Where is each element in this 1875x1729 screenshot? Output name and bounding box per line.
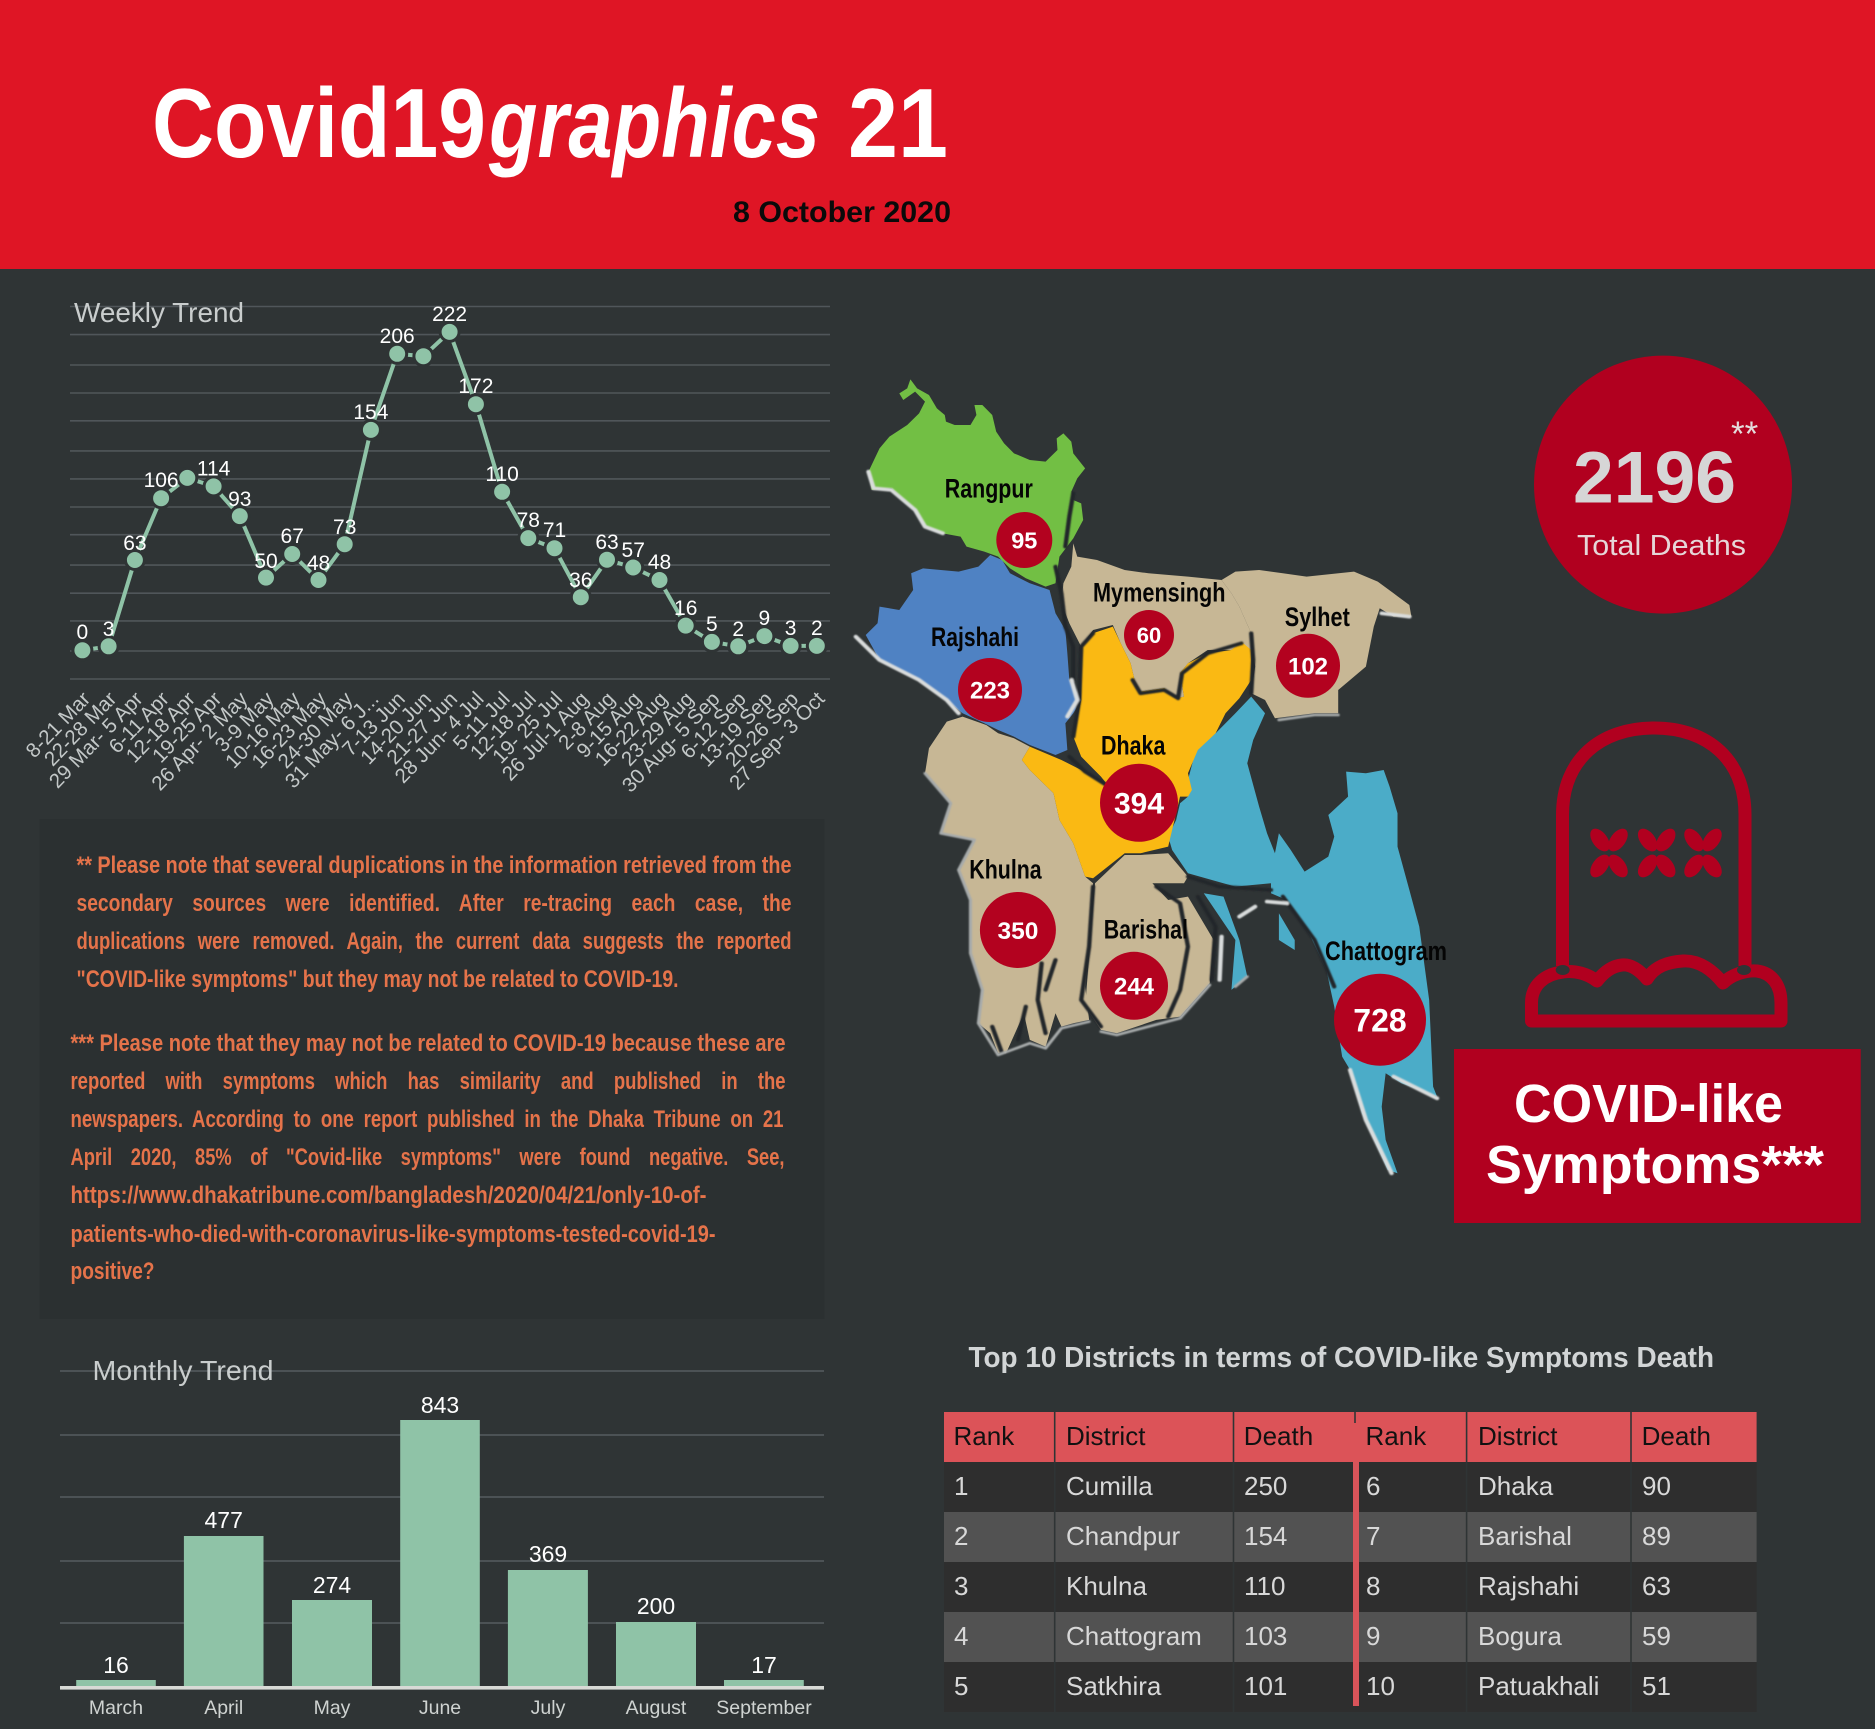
weekly line (82, 332, 817, 650)
badge numbers: 223 (970, 678, 1010, 704)
weekly x axis labels (21, 687, 830, 797)
bar values: 477 (205, 1507, 243, 1533)
bar values: 200 (637, 1593, 675, 1619)
weekly value labels: 206 (380, 325, 415, 348)
weekly x axis labels: 6-12 Sep (676, 687, 751, 763)
region names (931, 474, 1447, 966)
callout: COVID-like symptoms (1454, 1049, 1861, 1223)
weekly value labels: 3 (103, 618, 114, 641)
table rows: Rajshahi (1478, 1571, 1579, 1601)
table header: Rank (954, 1421, 1015, 1451)
badge numbers: 244 (1114, 974, 1155, 1000)
weekly value labels: 222 (432, 303, 467, 326)
region names: Rajshahi (931, 622, 1019, 652)
weekly value labels: 0 (77, 621, 88, 644)
bar values (103, 1392, 777, 1678)
table rows: 4 (954, 1621, 968, 1651)
weekly value labels: 73 (333, 516, 356, 539)
table rows: 89 (1642, 1521, 1671, 1551)
weekly value labels: 2 (732, 618, 744, 641)
table rows: Patuakhali (1478, 1671, 1599, 1701)
table header: Death (1244, 1421, 1313, 1451)
weekly x axis labels: 12-18 Apr (122, 687, 200, 767)
table heading: Top 10 Districts in terms of COVID-like Symptoms Death (968, 1342, 1714, 1374)
region names: Mymensingh (1093, 578, 1226, 608)
title: Covid19 (152, 68, 486, 178)
month labels: April (204, 1697, 243, 1719)
total footnote mark: ** (1731, 415, 1759, 454)
total caption: Total Deaths (1577, 530, 1746, 562)
table: top 10 districts (944, 1412, 1757, 1712)
table rows: Chandpur (1066, 1521, 1181, 1551)
badge numbers: 102 (1288, 654, 1328, 680)
bar values: 843 (421, 1392, 459, 1418)
region names: Barishal (1104, 914, 1188, 944)
weekly value labels: 36 (569, 569, 592, 592)
weekly x axis labels: 23-29 Aug (617, 687, 698, 771)
title: graphics (488, 68, 820, 178)
weekly x axis labels: 19- 25 Jul (488, 687, 567, 768)
badge numbers: 394 (1114, 788, 1164, 820)
region: Chattogram (1168, 697, 1437, 1173)
total deaths circle (1534, 356, 1792, 614)
table rows: 8 (1366, 1571, 1380, 1601)
table rows (954, 1471, 1671, 1701)
table rows: Chattogram (1066, 1621, 1202, 1651)
table rows: 154 (1244, 1521, 1287, 1551)
weekly x axis labels: 6-11 Apr (104, 687, 174, 758)
monthly trend heading: Monthly Trend (92, 1355, 274, 1386)
weekly x axis labels: 12-18 Jul (466, 687, 541, 764)
table rows: Bogura (1478, 1621, 1562, 1651)
table rows: 6 (1366, 1471, 1380, 1501)
weekly x axis labels: 31 May- 6 J... (281, 687, 383, 793)
table rows: 90 (1642, 1471, 1671, 1501)
weekly x axis labels: 2-8 Aug (554, 687, 620, 754)
table rows: 51 (1642, 1671, 1671, 1701)
region names: Dhaka (1101, 730, 1166, 760)
badge numbers: 95 (1011, 528, 1037, 554)
region: Rangpur (868, 379, 1085, 587)
weekly x axis labels: 16-23 May (247, 687, 332, 773)
note: similarity: newspapers. According to one report published in the Dhaka Tribune on 21 (70, 1106, 784, 1133)
weekly x axis labels: 9-15 Aug (572, 687, 646, 763)
bars (76, 1420, 804, 1686)
table rows: Barishal (1478, 1521, 1572, 1551)
region names: Khulna (969, 854, 1042, 884)
weekly x axis labels: 29 Mar- 5 Apr (45, 687, 148, 793)
table rows: 250 (1244, 1471, 1287, 1501)
weekly x axis labels: 26 Apr- 2 May (147, 687, 253, 795)
weekly value labels: 114 (197, 458, 231, 480)
weekly value labels: 50 (254, 550, 278, 573)
region: Rajshahi (866, 555, 1081, 755)
panel: notes (40, 819, 824, 1319)
region: Mymensingh (1061, 543, 1251, 698)
region: Barishal (1085, 853, 1214, 1033)
count badges (958, 512, 1426, 1066)
weekly x axis labels: 3-9 May (211, 687, 279, 757)
weekly x axis labels: 26 Jul-1 Aug (498, 687, 593, 785)
note: similarity (70, 1030, 786, 1285)
note: similarity: patients-who-died-with-coronavirus-like-symptoms-tested-covid-19- (70, 1221, 716, 1248)
callout: COVID-like symptoms: Symptoms*** (1486, 1135, 1824, 1195)
bar values: 274 (313, 1572, 351, 1598)
weekly x axis labels: 21-27 Jun (382, 687, 462, 769)
line chart: weekly trend (21, 297, 830, 797)
note: similarity: https://www.dhakatribune.com/bangladesh/2020/04/21/only-10-of- (70, 1182, 706, 1209)
total number: 2196 (1573, 438, 1736, 518)
weekly value labels: 63 (595, 531, 619, 554)
note: duplications: ** Please note that several duplications in the information retrieved from the (76, 852, 792, 879)
weekly x axis labels: 13-19 Sep (695, 687, 777, 772)
weekly markers (73, 322, 826, 660)
weekly x axis labels: 7-13 Jun (338, 687, 410, 761)
weekly trend heading: Weekly Trend (74, 297, 244, 328)
table rows: 1 (954, 1471, 968, 1501)
weekly value labels: 48 (307, 552, 330, 575)
note: similarity: reported with symptoms which has similarity and published in the (70, 1068, 786, 1095)
note: similarity: *** Please note that they may not be related to COVID-19 because these are (70, 1030, 786, 1057)
table header: Death (1642, 1421, 1711, 1451)
badge numbers (970, 528, 1407, 1038)
title: 21 (848, 68, 948, 178)
weekly value labels: 16 (674, 597, 697, 620)
table rows: 5 (954, 1671, 968, 1701)
weekly value labels: 63 (123, 532, 147, 555)
icon: tombstone (1532, 728, 1781, 1021)
badge numbers: 60 (1137, 623, 1161, 648)
weekly x axis labels: 16-22 Aug (591, 687, 672, 771)
table rows: Dhaka (1478, 1471, 1554, 1501)
weekly x axis labels: 24-30 May (273, 687, 358, 773)
weekly value labels: 2 (811, 617, 823, 640)
weekly value labels (77, 303, 823, 644)
month labels: September (716, 1697, 812, 1719)
month labels: July (531, 1697, 566, 1719)
month labels (89, 1697, 812, 1719)
weekly value labels: 110 (485, 463, 519, 486)
weekly x axis labels: 22-28 Mar (40, 687, 121, 771)
weekly x axis labels: 27 Sep- 3 Oct (725, 687, 830, 794)
region: Dhaka (1022, 627, 1251, 878)
weekly x axis labels: 19-25 Apr (148, 687, 226, 767)
delta islands (1204, 893, 1295, 990)
badge numbers: 728 (1353, 1002, 1407, 1038)
table header: Rank (1366, 1421, 1427, 1451)
weekly value labels: 48 (648, 551, 671, 574)
region: Sylhet (1222, 570, 1411, 718)
table rows: 110 (1244, 1571, 1285, 1601)
table rows: Satkhira (1066, 1671, 1162, 1701)
date: 8 October 2020 (733, 196, 951, 229)
region names: Chattogram (1325, 936, 1447, 966)
weekly value labels: 71 (543, 519, 566, 542)
table rows: 101 (1244, 1671, 1287, 1701)
weekly x axis labels: 30 Aug- 5 Sep (618, 687, 724, 797)
weekly value labels: 154 (353, 401, 389, 424)
table rows: 7 (1366, 1521, 1380, 1551)
weekly value labels: 57 (622, 539, 645, 562)
note: duplications: duplications were removed. Again, the current data suggests the reported (76, 928, 792, 955)
region names: Rangpur (945, 474, 1033, 504)
month labels: March (89, 1697, 143, 1719)
icon: crosses (1586, 825, 1726, 881)
region: Khulna (925, 717, 1093, 1053)
table rows: 10 (1366, 1671, 1395, 1701)
table header (954, 1421, 1711, 1451)
weekly value labels: 3 (785, 617, 796, 640)
table rows: Khulna (1066, 1571, 1147, 1601)
table rows: 59 (1642, 1621, 1671, 1651)
weekly value labels: 78 (517, 509, 540, 532)
callout: COVID-like symptoms: COVID-like (1514, 1074, 1783, 1134)
table header: District (1478, 1421, 1558, 1451)
note: duplications: secondary sources were identified. After re-tracing each case, the (76, 890, 792, 917)
coastal river edges (856, 472, 1437, 1173)
month labels: June (419, 1697, 461, 1719)
bar values: 16 (103, 1652, 129, 1678)
weekly value labels: 5 (706, 613, 718, 636)
table rows: 2 (954, 1521, 968, 1551)
title (152, 68, 948, 178)
weekly x axis labels: 20-26 Sep (721, 687, 803, 772)
table rows: 103 (1244, 1621, 1287, 1651)
table rows: Cumilla (1066, 1471, 1153, 1501)
weekly x axis labels: 14-20 Jun (356, 687, 436, 769)
note: similarity: April 2020, 85% of "Covid-like symptoms" were found negative. See, (70, 1144, 784, 1171)
map of Bangladesh divisions (856, 379, 1447, 1173)
region names: Sylhet (1285, 602, 1350, 632)
weekly x axis labels: 5-11 Jul (449, 687, 515, 755)
weekly x axis labels: 8-21 Mar (21, 687, 95, 762)
bar values: 17 (751, 1652, 777, 1678)
weekly x axis labels: 10-16 May (221, 687, 305, 773)
bar chart: monthly trend (60, 1355, 824, 1719)
month labels: May (314, 1697, 351, 1719)
weekly value labels: 93 (228, 488, 251, 511)
note: similarity: positive? (70, 1258, 154, 1285)
weekly value labels: 9 (759, 607, 770, 630)
weekly value labels: 172 (458, 375, 493, 398)
table rows: 63 (1642, 1571, 1671, 1601)
weekly x axis labels: 28 Jun- 4 Jul (390, 687, 488, 788)
note: duplications: "COVID-like symptoms" but they may not be related to COVID-19. (76, 966, 678, 993)
weekly value labels: 106 (144, 469, 179, 492)
note: duplications (76, 852, 792, 993)
table header: District (1066, 1421, 1146, 1451)
bar values: 369 (529, 1541, 567, 1567)
weekly value labels: 67 (281, 525, 304, 548)
badge numbers: 350 (997, 918, 1038, 945)
header banner (0, 0, 1875, 269)
table rows: 9 (1366, 1621, 1380, 1651)
table rows: 3 (954, 1571, 968, 1601)
month labels: August (626, 1697, 687, 1719)
